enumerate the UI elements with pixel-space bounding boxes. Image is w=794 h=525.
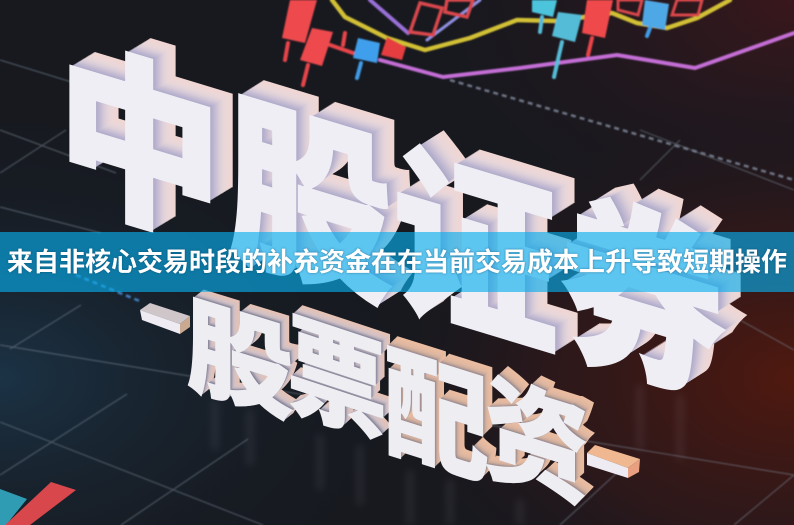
letter 股: 股 [228,77,393,334]
dash right [587,445,640,478]
floor bars bottom left [0,482,76,525]
caption text: 来自非核心交易时段的补充资金在在当前交易成本上升导致短期操作 [7,247,787,277]
reflections of letters on floor [215,385,680,525]
letter 中: 中 [57,23,222,275]
letter 券: 券 [560,174,725,431]
letter 票: 票 [287,303,387,460]
3D subtitle: 股票配资 [186,287,595,525]
3D title: 中股证券 [57,23,748,431]
letter 配: 配 [384,335,489,502]
candlestick chart [282,0,794,85]
dash left [140,303,190,334]
letter 证: 证 [393,127,558,384]
candles [282,0,702,85]
letter 股 small: 股 [186,287,294,437]
caption band [0,232,794,292]
letter 资: 资 [484,363,589,525]
dashed lines [76,80,794,302]
chart lines [332,0,794,77]
